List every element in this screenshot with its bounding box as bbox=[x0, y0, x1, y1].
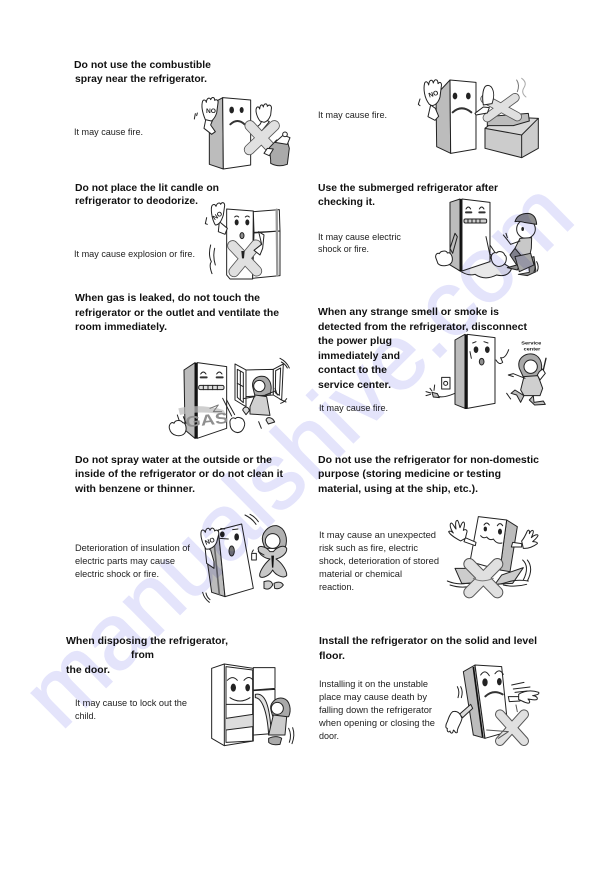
heading: submerged fridge: Use the submerged refrigerator after bbox=[318, 182, 498, 194]
panel: gas leak bbox=[75, 292, 289, 439]
text: falling risk: Installing it on the unstable bbox=[319, 679, 428, 689]
panel: candle on box, fire risk bbox=[318, 78, 538, 158]
illustration: fridge with burning item bbox=[418, 78, 538, 158]
heading: submerged fridge bbox=[318, 182, 498, 208]
figure: girl with phone bbox=[507, 354, 546, 405]
illustration: child climbing in fridge bbox=[212, 664, 294, 746]
text: falling risk: place may cause death by bbox=[319, 692, 427, 702]
text: fire risk: It may cause fire. bbox=[74, 127, 143, 137]
text: unexpected risk: risk such as fire, electric bbox=[319, 543, 418, 553]
icon: wall outlet bbox=[442, 377, 450, 389]
text: unexpected risk: It may cause an unexpected bbox=[319, 530, 436, 540]
heading: strange smell: When any strange smell or smoke is bbox=[318, 306, 499, 318]
illustration: fridge, outlet and girl calling service center bbox=[426, 334, 546, 409]
illustration: open fridge with candle: NO bbox=[212, 210, 224, 222]
heading: strange smell bbox=[318, 306, 527, 391]
text: unexpected risk: reaction. bbox=[319, 582, 354, 592]
heading: combustible spray bbox=[74, 59, 211, 85]
panel: level floor bbox=[318, 635, 539, 741]
illustration: fridge and girl with spray bbox=[201, 514, 287, 602]
label: service center bbox=[521, 340, 542, 353]
text: shock risk: shock or fire. bbox=[318, 244, 369, 254]
heading: strange smell: service center. bbox=[318, 379, 391, 391]
text: fire risk: It may cause fire. bbox=[318, 110, 387, 120]
panel: strange smell or smoke bbox=[318, 306, 546, 413]
heading: disposing: the door. bbox=[66, 664, 110, 676]
illustration: toppling fridge bbox=[446, 665, 539, 741]
icon: power plug and cord bbox=[426, 385, 455, 398]
illustration: fridge and girl with spray: NO bbox=[204, 537, 216, 547]
illustration: fridge with spray can bbox=[194, 97, 290, 169]
text: lock out the child: child. bbox=[75, 711, 96, 721]
text: insulation deterioration bbox=[75, 543, 190, 579]
heading: level floor: Install the refrigerator on the solid and level bbox=[319, 635, 537, 647]
illustration: open fridge with candle bbox=[205, 203, 280, 279]
panel: combustible spray bbox=[74, 59, 290, 169]
label: GAS: GAS bbox=[185, 410, 229, 431]
watermark: manualshive.com bbox=[3, 162, 592, 746]
heading: gas leak bbox=[75, 292, 279, 333]
heading: non-domestic use: purpose (storing medicine or testing bbox=[318, 468, 501, 480]
heading: disposing bbox=[66, 635, 228, 676]
heading: gas leak: room immediately. bbox=[75, 321, 167, 333]
heading: non-domestic use: Do not use the refrigerator for non-domestic bbox=[318, 454, 539, 466]
heading: combustible spray: spray near the refrigerator. bbox=[75, 73, 207, 85]
heading: non-domestic use: material, using at the ship, etc.). bbox=[318, 483, 478, 495]
heading: disposing: from bbox=[131, 649, 154, 661]
heading: spray water: inside of the refrigerator or do not clean it bbox=[75, 468, 283, 480]
text: shock risk bbox=[318, 232, 401, 254]
panel: submerged fridge bbox=[318, 182, 538, 278]
heading: strange smell: detected from the refrigerator, disconnect bbox=[318, 321, 527, 333]
heading: gas leak: When gas is leaked, do not touch the bbox=[75, 292, 260, 304]
panel: non-domestic use bbox=[318, 454, 539, 592]
text: explosion risk: It may cause explosion or fire. bbox=[74, 249, 195, 259]
heading: combustible spray: Do not use the combustible bbox=[74, 59, 211, 71]
heading: disposing: When disposing the refrigerator, bbox=[66, 635, 228, 647]
text: shock risk: It may cause electric bbox=[318, 232, 401, 242]
illustration: fridge with burning item: NO bbox=[428, 90, 439, 100]
panel: lit candle bbox=[74, 182, 280, 279]
heading: spray water: with benzene or thinner. bbox=[74, 483, 195, 495]
text: falling risk: door. bbox=[319, 731, 339, 741]
heading: lit candle: refrigerator to deodorize. bbox=[75, 195, 198, 207]
heading: lit candle bbox=[75, 182, 219, 207]
text: unexpected risk: shock, deterioration of stored bbox=[319, 556, 439, 566]
illustration: fridge with spray can: NO bbox=[206, 108, 216, 115]
text: falling risk: falling down the refrigerator bbox=[319, 705, 432, 715]
text: insulation deterioration: electric parts may cause bbox=[75, 556, 175, 566]
heading: submerged fridge: checking it. bbox=[318, 196, 375, 208]
heading: level floor bbox=[319, 635, 537, 662]
heading: spray water: Do not spray water at the outside or the bbox=[75, 454, 272, 466]
text: lock out the child bbox=[75, 698, 187, 721]
illustration: sinking fridge bbox=[447, 517, 538, 592]
panel: disposing the fridge bbox=[66, 635, 294, 746]
text: insulation deterioration: Deterioration of insulation of bbox=[75, 543, 190, 553]
label: service center: center bbox=[524, 347, 540, 353]
heading: strange smell: the power plug bbox=[318, 335, 392, 347]
panel: no spraying water bbox=[74, 454, 287, 602]
heading: gas leak: refrigerator or the outlet and ventilate the bbox=[75, 307, 279, 319]
heading: strange smell: immediately and bbox=[318, 350, 400, 362]
text: unexpected risk bbox=[319, 530, 439, 592]
illustration: flooded fridge and repairman bbox=[436, 199, 538, 278]
heading: level floor: floor. bbox=[319, 650, 345, 662]
heading: lit candle: Do not place the lit candle on bbox=[75, 182, 219, 194]
heading: spray water bbox=[74, 454, 283, 495]
text: falling risk: when opening or closing the bbox=[318, 718, 435, 728]
heading: non-domestic use bbox=[318, 454, 539, 495]
heading: strange smell: contact to the bbox=[318, 364, 387, 376]
text: lock out the child: It may cause to lock out the bbox=[75, 698, 187, 708]
text: insulation deterioration: electric shock or fire. bbox=[75, 569, 159, 579]
text: unexpected risk: material or chemical bbox=[319, 569, 402, 579]
illustration: gas leak with fridge and girl at window bbox=[169, 358, 289, 439]
label: service center: Service bbox=[521, 340, 542, 346]
text: fire risk: It may cause fire. bbox=[319, 403, 388, 413]
text: falling risk bbox=[318, 679, 435, 741]
